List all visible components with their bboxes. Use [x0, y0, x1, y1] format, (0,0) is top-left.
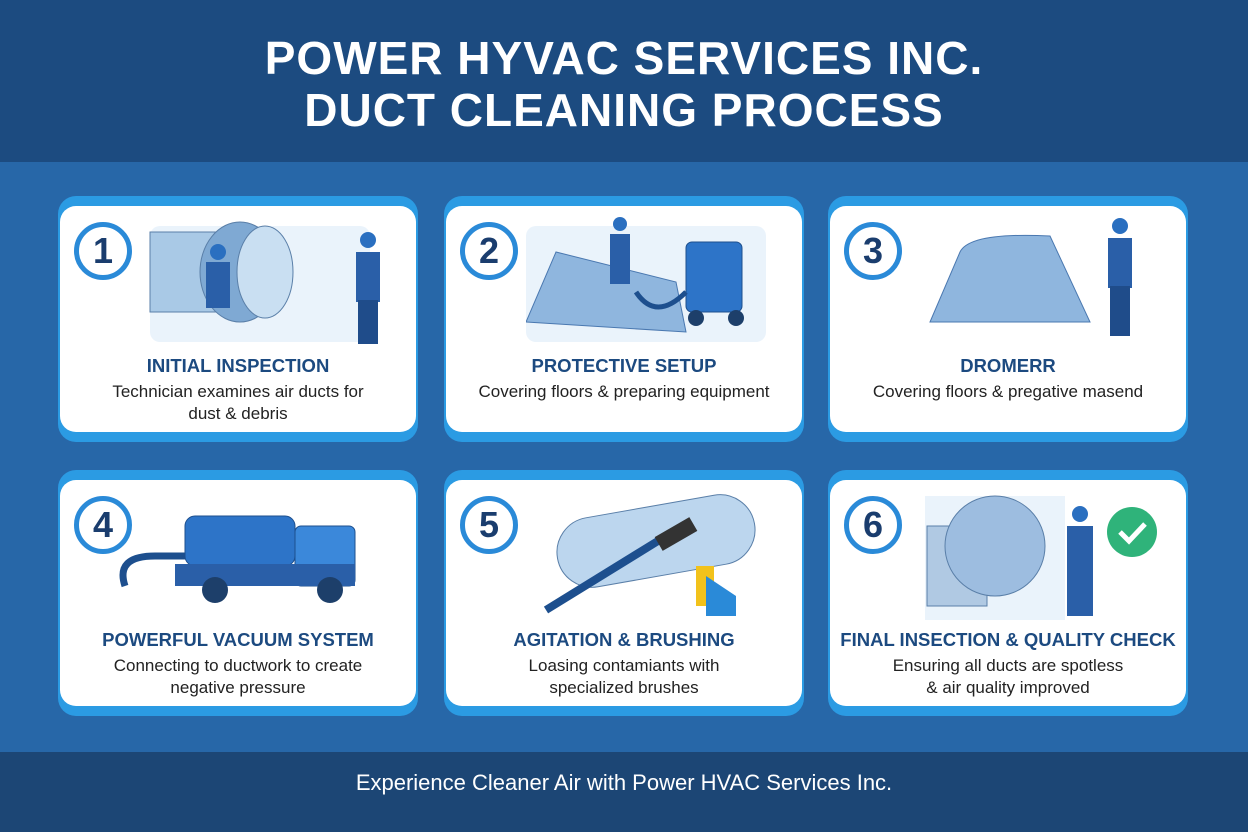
- description: Technician examines air ducts for: [112, 382, 364, 401]
- description: Connecting to ductwork to create: [114, 656, 362, 675]
- heading: AGITATION & BRUSHING: [513, 629, 735, 650]
- number 3: 3: [863, 230, 883, 271]
- panel: step 2: [444, 196, 804, 442]
- number 6: 6: [863, 504, 883, 545]
- description: [112, 382, 364, 423]
- icon: drop cloth: [929, 218, 1132, 336]
- description: Covering floors & preparing equipment: [478, 382, 770, 401]
- icon: final check: [925, 496, 1157, 620]
- panel: step 4: [58, 470, 418, 716]
- description: [893, 656, 1123, 697]
- footer: [0, 752, 1248, 832]
- number 3: [844, 222, 902, 280]
- number 2: [460, 222, 518, 280]
- number 4: 4: [93, 504, 113, 545]
- heading: PROTECTIVE SETUP: [531, 355, 717, 376]
- description: [529, 656, 719, 697]
- heading: INITIAL INSPECTION: [147, 355, 329, 376]
- description: Loasing contamiants with: [529, 656, 719, 675]
- panel: step 1: [58, 196, 418, 442]
- number 6: [844, 496, 902, 554]
- icon: duct inspection: [150, 222, 380, 344]
- description: dust & debris: [188, 404, 288, 423]
- panel: step 3: [828, 196, 1188, 442]
- number 5: 5: [479, 504, 499, 545]
- description: negative pressure: [170, 678, 306, 697]
- description: & air quality improved: [926, 678, 1090, 697]
- title: POWER HYVAC SERVICES INC.: [265, 32, 983, 84]
- description: Covering floors & pregative masend: [873, 382, 1143, 401]
- number 4: [74, 496, 132, 554]
- heading: DROMERR: [960, 355, 1056, 376]
- number 1: 1: [93, 230, 113, 271]
- number 1: [74, 222, 132, 280]
- description: [114, 656, 362, 697]
- icon: protective setup: [526, 217, 766, 342]
- panel: step 5: [444, 470, 804, 716]
- panel: step 6: [828, 470, 1188, 716]
- title: DUCT CLEANING PROCESS: [304, 84, 944, 136]
- number 2: 2: [479, 230, 499, 271]
- heading: POWERFUL VACUUM SYSTEM: [102, 629, 374, 650]
- title: [0, 0, 1248, 162]
- description: specialized brushes: [549, 678, 699, 697]
- footer: Experience Cleaner Air with Power HVAC Services Inc.: [356, 770, 892, 795]
- heading: FINAL INSECTION & QUALITY CHECK: [840, 629, 1176, 650]
- number 5: [460, 496, 518, 554]
- icon: vacuum truck: [120, 516, 356, 603]
- icon: brushing duct: [544, 494, 756, 616]
- description: Ensuring all ducts are spotless: [893, 656, 1123, 675]
